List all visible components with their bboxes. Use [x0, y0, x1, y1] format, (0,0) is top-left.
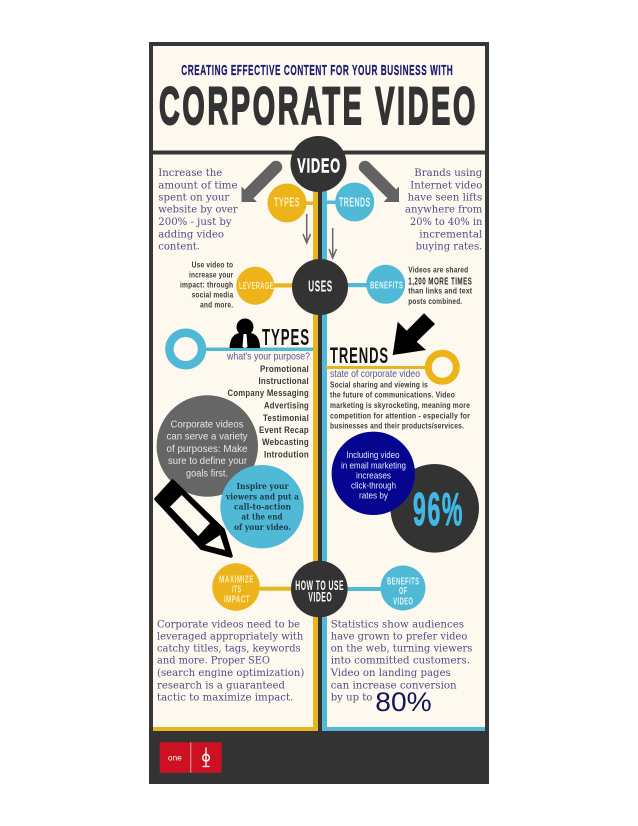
right panel rail	[322, 190, 485, 731]
heading: trends: TRENDS	[330, 343, 389, 368]
list: video types: Advertising	[264, 400, 309, 412]
text: trends paragraph	[330, 381, 470, 431]
arrow: right gray	[365, 167, 399, 202]
text: SEO paragraph: Corporate videos need to be	[157, 618, 300, 630]
icon: pencil	[156, 481, 231, 556]
logo	[160, 742, 222, 773]
node: uses: USES	[308, 279, 333, 296]
callout: email marketing circle: click-through	[351, 480, 396, 492]
list: video types: Webcasting	[262, 437, 309, 448]
callout: email marketing circle: Including video	[346, 450, 400, 461]
trends ring and line	[326, 353, 456, 381]
callout: email marketing circle: increases	[356, 470, 391, 482]
text: conversion paragraph	[330, 618, 472, 703]
text: time on site: website by over	[158, 204, 239, 216]
text: buying rates: 20% to 40% in	[410, 216, 483, 228]
text: conversion paragraph: can increase conversion	[331, 679, 457, 691]
callout: gray purposes circle: can serve a variety	[166, 430, 248, 442]
text: trends paragraph: businesses and their products/services.	[330, 422, 464, 431]
callout: gray purposes circle: goals first.	[186, 468, 228, 480]
text: buying rates: Brands using	[414, 167, 483, 179]
text: conversion paragraph: Video on landing pages	[330, 667, 451, 679]
node: maximize: MAXIMIZE	[219, 575, 254, 586]
node: types connector and circle	[268, 184, 314, 222]
node: uses	[292, 259, 348, 315]
node: leverage: LEVERAGE	[239, 280, 274, 292]
text: conversion paragraph: Statistics show audiences	[331, 618, 464, 630]
node: video	[290, 136, 346, 192]
node: benefits of video	[346, 566, 426, 610]
text: benefits note: posts combined.	[408, 297, 462, 306]
callout: email marketing circle: in email marketing	[341, 460, 406, 472]
callout: blue inspire circle: Inspire your	[236, 481, 289, 491]
text: SEO paragraph: research is a guaranteed	[157, 679, 285, 691]
text: buying rates: anywhere from	[405, 204, 482, 216]
node: leverage	[236, 267, 294, 305]
callout: blue inspire circle: viewers and put a	[225, 492, 299, 502]
heading: types: TYPES	[262, 324, 310, 350]
node: types connector and circle: TYPES	[274, 195, 300, 210]
text: conversion paragraph: on the web, turning viewers	[331, 643, 472, 655]
callout: email marketing circle: rates by	[359, 490, 388, 502]
text: time on site	[158, 167, 239, 252]
text: conversion paragraph: by up to	[331, 691, 372, 703]
arrow: left gray	[242, 167, 276, 202]
node: benefits	[346, 265, 405, 304]
list: video types: Event Recap	[259, 425, 309, 436]
callout: blue inspire circle: call-to-action	[234, 502, 291, 512]
icon: black arrow	[393, 313, 435, 355]
callout: gray purposes circle	[157, 395, 258, 497]
node: trends connector and circle	[326, 182, 374, 222]
callout: email marketing circle	[332, 432, 415, 515]
text: SEO paragraph: catchy titles, tags, keywords	[157, 643, 301, 655]
arrow: small down right	[329, 228, 336, 258]
subheading: state of video: state of corporate video	[330, 368, 420, 380]
callout: blue inspire circle: at the end	[242, 512, 283, 522]
list: video types: Introdution	[264, 450, 309, 460]
callout: 96% circle	[390, 464, 479, 553]
stat: 80%: 80%	[375, 687, 432, 717]
text: conversion paragraph: have grown to prefer video	[331, 630, 467, 642]
callout: gray purposes circle: Corporate videos	[170, 418, 244, 430]
node: benefits of video: BENEFITS	[387, 576, 420, 587]
text: trends paragraph: the future of communications. Video	[330, 391, 455, 400]
types ring and line	[169, 333, 313, 365]
text: buying rates: incremental	[419, 228, 483, 240]
text: time on site: 200% - just by	[158, 216, 232, 228]
text: leverage note: and more.	[200, 300, 233, 309]
text: time on site: adding video	[158, 228, 224, 240]
text: benefits note: 1,200 MORE TIMES	[408, 275, 472, 287]
node: how to use video: HOW TO USE	[295, 578, 344, 593]
list: video types: Company Messaging	[228, 388, 309, 399]
text: SEO paragraph: leveraged appropriately with	[157, 630, 304, 642]
list: video types: Promotional	[260, 364, 309, 375]
node: video: VIDEO	[297, 154, 341, 177]
arrow: small down left	[303, 214, 310, 243]
node: maximize: ITS	[232, 584, 242, 595]
text: buying rates: buying rates.	[416, 240, 482, 252]
callout: blue inspire circle: of your video.	[234, 522, 291, 532]
left panel rail	[153, 190, 318, 731]
text: SEO paragraph: (search engine optimization)	[157, 667, 304, 679]
poster frame	[151, 44, 487, 782]
list: video types: Instructional	[258, 376, 309, 387]
text: leverage note: impact: through	[180, 280, 233, 289]
text: leverage note: increase your	[189, 270, 233, 279]
callout: 96% circle: 96%	[413, 483, 464, 535]
node: maximize	[212, 563, 294, 611]
text: SEO paragraph: and more. Proper SEO	[157, 655, 270, 667]
icon: businessman	[230, 318, 260, 348]
text: SEO paragraph	[157, 618, 304, 703]
text: leverage note: social media	[192, 290, 234, 299]
text: benefits note: than links and text	[408, 287, 472, 296]
text: leverage note: Use video to	[192, 260, 233, 269]
callout: blue inspire circle	[220, 465, 304, 548]
text: trends paragraph: marketing is skyrocketing, meaning more	[330, 401, 470, 410]
list: video types	[228, 364, 309, 460]
text: time on site: spent on your	[158, 192, 230, 204]
text: benefits note: Videos are shared	[408, 266, 468, 275]
text: buying rates: have seen lifts	[408, 192, 482, 204]
text: time on site: content.	[158, 240, 200, 252]
callout: gray purposes circle: of purposes: Make	[166, 443, 248, 455]
node: maximize: IMPACT	[224, 594, 250, 605]
text: buying rates: Internet video	[410, 179, 482, 191]
node: benefits of video: OF	[399, 586, 408, 597]
callout: gray purposes circle: sure to define your	[168, 455, 247, 467]
node: benefits of video: VIDEO	[393, 596, 413, 607]
logo: one	[168, 752, 182, 762]
node: how to use video	[291, 561, 348, 617]
subheading: purpose: what's your purpose?	[226, 350, 310, 362]
text: buying rates	[405, 167, 483, 252]
text: benefits note	[408, 266, 472, 306]
text: trends paragraph: Social sharing and viewing is	[330, 381, 428, 390]
node: how to use video: VIDEO	[308, 590, 332, 605]
text: conversion paragraph: into committed customers.	[331, 655, 470, 667]
text: trends paragraph: competition for attention - especially for	[330, 411, 470, 420]
text: time on site: Increase the	[158, 167, 222, 179]
text: time on site: amount of time	[158, 179, 238, 191]
list: video types: Testimonial	[263, 413, 309, 424]
text: leverage note	[180, 260, 234, 309]
node: trends connector and circle: TRENDS	[339, 195, 371, 210]
node: benefits: BENEFITS	[370, 279, 403, 291]
footer band	[149, 731, 489, 784]
text: SEO paragraph: tactic to maximize impact.	[157, 691, 293, 703]
